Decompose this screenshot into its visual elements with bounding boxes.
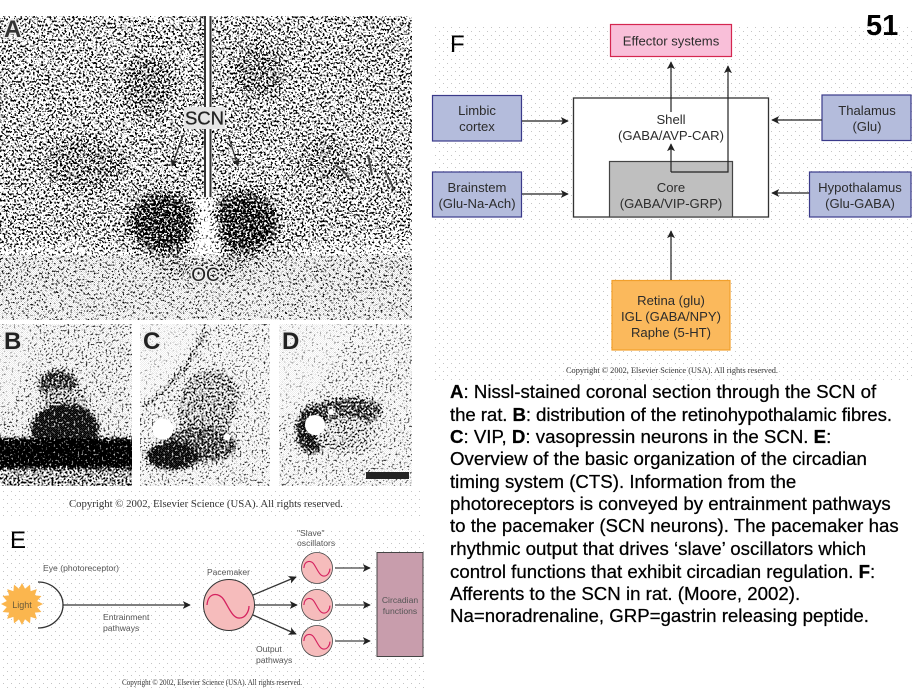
caption text block: A: Nissl-stained coronal section through the SCN of [450,381,877,402]
panel E: circadian timing system diagram [1,527,423,687]
arrows to SCN [172,135,238,166]
label output pathways: pathways [256,655,292,665]
retina IGL raphe box [612,280,730,350]
thalamus box [822,95,911,140]
limbic cortex box: Limbic [458,103,496,118]
hypothalamus box: Hypothalamus [818,180,902,195]
caption text block: the rat. B: distribution of the retinohypothalamic fibres. [450,404,892,425]
label eye: Eye (photoreceptor) [43,563,119,573]
label output pathways: Output [256,644,282,654]
third ventricle [204,16,212,197]
label slave oscillators: "Slave" [297,528,325,538]
caption text block: control functions that exhibit circadian regulation. F: [450,561,875,582]
caption text block: Overview of the basic organization of the circadian [450,448,867,469]
hypothalamus box: (Glu-GABA) [825,196,895,211]
label C: C [143,328,160,355]
limbic cortex box: cortex [459,119,495,134]
hypothalamus box [810,172,911,217]
shell box: Shell [656,112,686,127]
shell box [574,98,768,217]
caption text block: C: VIP, D: vasopressin neurons in the SCN. E: [450,426,831,447]
pacemaker [204,567,254,630]
slave oscillators [302,552,332,656]
label E: E [10,527,26,554]
retina IGL raphe box: Retina (glu) [637,293,705,308]
brainstem box: Brainstem [448,180,507,195]
effector systems box [610,24,732,56]
eye arc [38,582,63,628]
shell box: (GABA/AVP-CAR) [618,128,724,143]
output arrows [253,577,297,634]
retina IGL raphe box: IGL (GABA/NPY) [621,309,721,324]
label slave oscillators: oscillators [297,538,335,548]
brainstem box: (Glu-Na-Ach) [438,196,516,211]
vessel holes [305,409,334,435]
arrows to circadian functions [335,568,370,641]
label OC: OC [191,265,220,286]
caption text block [450,381,899,626]
panel B: retinohypothalamic fibres [0,324,132,486]
caption text block: photoreceptors is conveyed by entrainment pathways [450,493,891,514]
icon: light: Light [12,600,32,610]
label D: D [282,328,299,355]
caption text block: to the pacemaker (SCN neurons). The pacemaker has [450,515,899,536]
arrow: entrainment [63,604,190,606]
vessel holes [152,418,230,440]
copyright E: Copyright © 2002, Elsevier Science (USA). All rights reserved. [122,678,302,687]
label F: F [450,31,465,58]
label entrainment: Entrainment [103,612,150,622]
page number: 51 [866,10,898,42]
label SCN: SCN [185,108,224,128]
core box [610,162,732,217]
icon: light [1,583,43,625]
caption text block: Afferents to the SCN in rat. (Moore, 2002). [450,583,800,604]
core box: Core [657,180,685,195]
fibre streaks [335,155,394,190]
retina IGL raphe box: Raphe (5-HT) [631,325,711,340]
caption text block: rhythmic output that drives ‘slave’ oscillators which [450,538,866,559]
thalamus box: (Glu) [852,119,882,134]
label A: A [4,16,21,43]
arrows [522,62,822,280]
label entrainment: pathways [103,623,139,633]
effector systems box: Effector systems [623,34,720,48]
panel D: vasopressin neurons [279,324,412,486]
panel A: Nissl-stained coronal section [0,16,412,320]
panel F: afferents to the SCN [432,24,911,375]
copyright F: Copyright © 2002, Elsevier Science (USA). All rights reserved. [566,365,778,375]
scale bar [366,472,409,479]
caption text block: timing system (CTS). Information from the [450,471,796,492]
copyright A-D: Copyright © 2002, Elsevier Science (USA). All rights reserved. [69,498,343,510]
circadian functions box: functions [383,606,417,616]
circadian functions box [377,552,423,656]
panel C: VIP neurons [140,324,270,486]
limbic cortex box [432,96,522,141]
thalamus box: Thalamus [838,103,896,118]
circadian functions box: Circadian [382,595,418,605]
caption text block: Na=noradrenaline, GRP=gastrin releasing peptide. [450,605,869,626]
pacemaker: Pacemaker [207,567,250,577]
core box: (GABA/VIP-GRP) [620,196,722,211]
label B: B [4,328,21,355]
brainstem box [432,172,522,217]
